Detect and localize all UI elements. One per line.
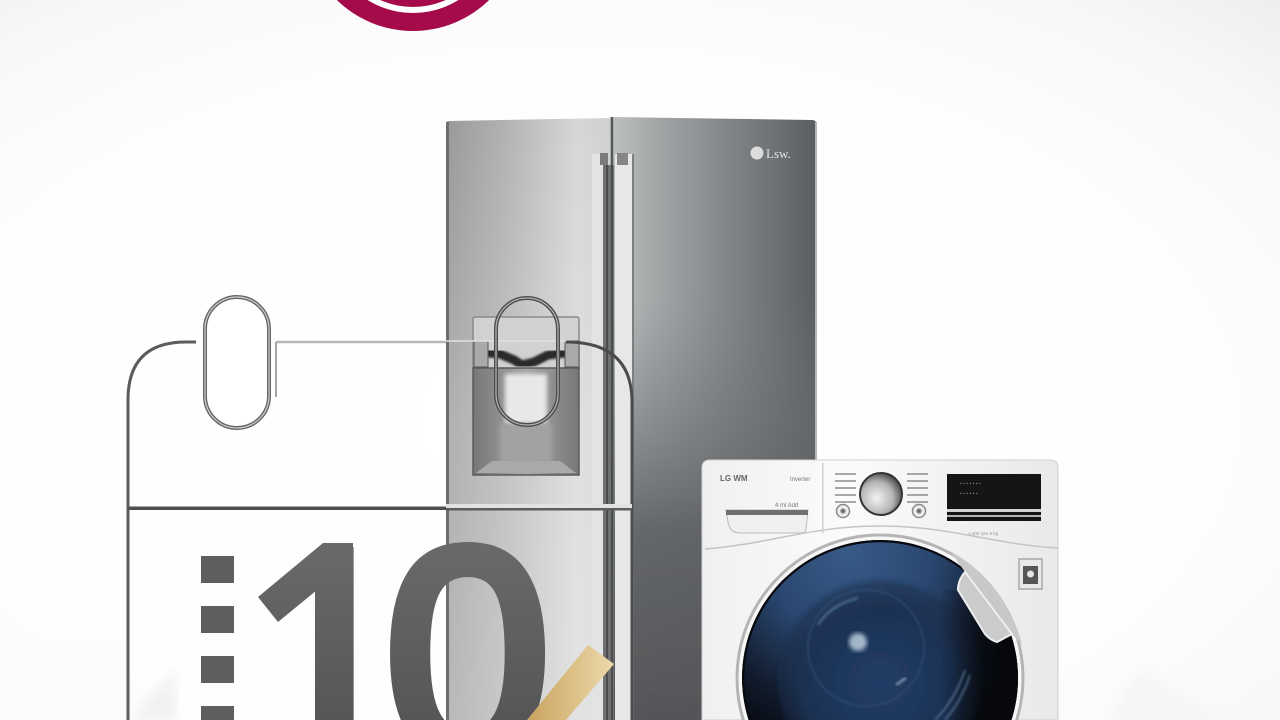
- handles: [592, 153, 634, 720]
- washer labels: LG WM: [720, 474, 748, 483]
- binder ring right: [496, 298, 558, 425]
- date dots: [201, 556, 234, 720]
- brand badge: [750, 146, 791, 161]
- detergent drawer: [726, 510, 808, 533]
- left door: [446, 118, 610, 720]
- display panel: ▪ ▪ ▪ ▪ ▪ ▪: [960, 491, 978, 497]
- program list: [835, 474, 928, 502]
- number 10: [258, 542, 546, 720]
- brand badge: Lsw.: [766, 146, 791, 161]
- washing machine: [702, 460, 1058, 720]
- washer labels: [720, 474, 810, 509]
- washer labels: 4 ml Add: [775, 503, 798, 509]
- control panel line: [705, 526, 1058, 549]
- door ring: [737, 535, 1023, 720]
- control knob: [860, 473, 902, 515]
- door gap: [610, 117, 614, 720]
- washer body: [702, 460, 1058, 720]
- water dispenser: [473, 317, 579, 475]
- right door: [614, 117, 817, 720]
- binder ring left: [205, 297, 269, 428]
- calendar divider: [128, 504, 632, 510]
- model text: 1,400 rpm 8 kg: [968, 531, 999, 536]
- gold check mark: [527, 645, 614, 720]
- small buttons: [836, 504, 926, 518]
- display panel: [947, 474, 1041, 521]
- logo: crimson circle: [304, 0, 522, 31]
- door glass: [742, 540, 1025, 720]
- door handle: [950, 551, 1022, 645]
- calendar outline: [128, 297, 632, 720]
- washer labels: Inverter: [790, 477, 810, 483]
- child lock icon: [1019, 559, 1042, 589]
- refrigerator: [446, 117, 840, 720]
- display panel: ▪ ▪ ▪ ▪ ▪ ▪ ▪: [960, 481, 981, 487]
